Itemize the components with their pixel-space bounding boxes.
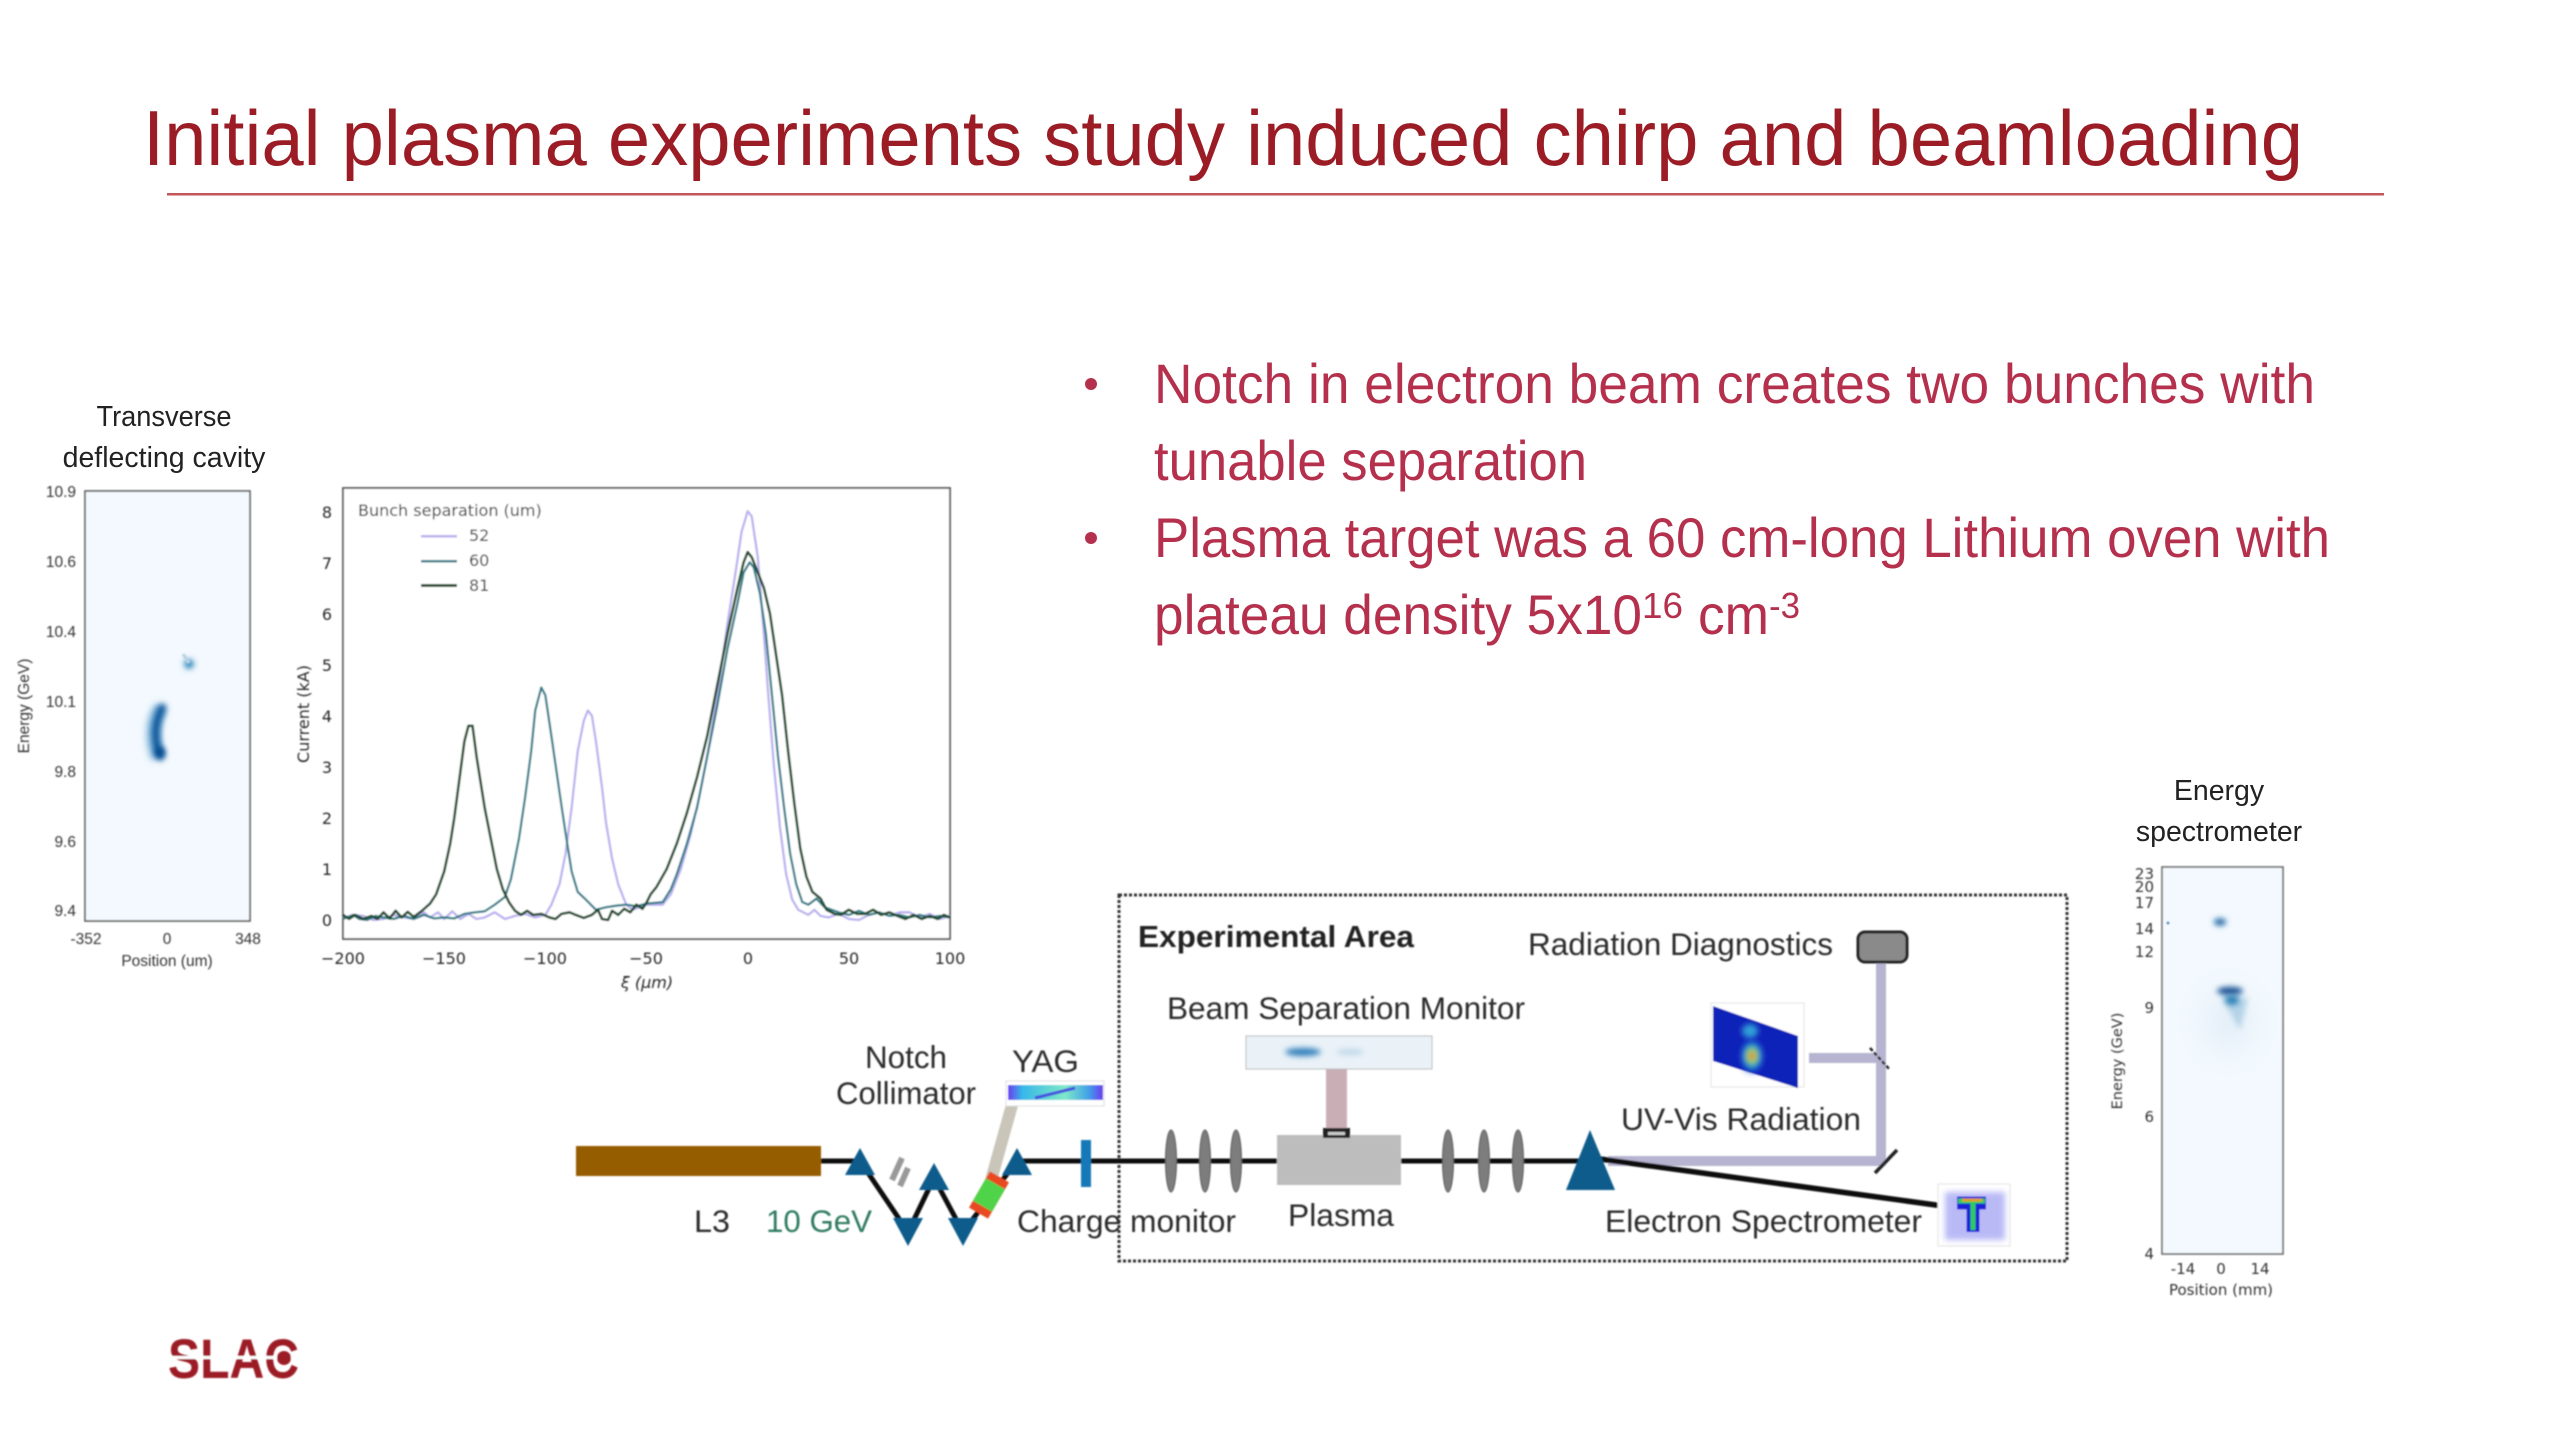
labels: Collimator [836,1075,976,1111]
caption: energy spectrometer: Energy [2174,775,2265,807]
YAG arm [990,1105,1012,1184]
bullet 2: 16 [1642,585,1683,626]
legend: 52 [469,526,489,545]
spectrometer image [1938,1184,2010,1246]
curves [343,511,950,920]
caption: transverse deflecting cavity: deflecting cavity [63,442,266,474]
x ticks and label: -14 [2171,1260,2195,1278]
UV-Vis image [1711,1003,1804,1088]
axis ticks: 9.4 [54,903,76,920]
labels: Electron Spectrometer [1605,1203,1922,1239]
YAG collimator block [969,1171,1009,1219]
y axis ticks: 7 [322,554,332,573]
heatmap: transverse deflecting cavity [16,484,261,970]
spots [153,654,194,758]
axis ticks: 9.8 [54,764,76,781]
x axis ticks [321,949,965,968]
L3 linac [576,1146,821,1176]
y axis ticks [322,503,332,930]
x axis ticks: −150 [422,949,466,968]
bullet 2: -3 [1769,585,1800,626]
y ticks: 9 [2144,999,2154,1017]
notch collimator icon [892,1158,908,1186]
curve 52 [343,511,950,920]
legend: 60 [469,551,489,570]
labels: YAG [1012,1043,1079,1079]
x ticks and label: 0 [2216,1260,2226,1278]
y axis label: Energy (GeV) [16,659,33,753]
bullet 2: Plasma target was a 60 cm-long Lithium oven with [1154,506,2330,569]
y axis ticks: 5 [322,656,332,675]
y ticks: 23 [2135,865,2154,883]
radiation diagnostics box [1858,932,1907,962]
label: experimental area: Experimental Area [1138,919,1415,954]
x ticks and label [2169,1260,2273,1299]
plot frame [343,488,950,939]
labels: Charge monitor [1017,1203,1236,1239]
labels: Radiation Diagnostics [1528,926,1833,962]
axis ticks: 10.6 [46,554,76,571]
y ticks: 12 [2135,943,2154,961]
experimental area box [1119,895,2067,1261]
bullet 2: plateau density 5x10 [1154,583,1642,646]
x labels: 348 [235,931,261,948]
line chart: current vs position [294,488,965,992]
legend: 81 [469,576,489,595]
beamline diagram [576,895,2067,1261]
mirrors [1870,1048,1897,1173]
caption: energy spectrometer [2136,775,2303,848]
YAG image [1006,1081,1104,1106]
axis titles: Current (kA) [294,665,313,763]
caption: transverse deflecting cavity [63,401,266,474]
labels: Plasma [1288,1197,1394,1233]
bullet 1: tunable separation [1154,429,1587,492]
y ticks [2135,865,2154,1263]
x axis ticks: −100 [523,949,567,968]
caption: transverse deflecting cavity: Transverse [96,401,232,433]
axis ticks: 10.9 [46,484,76,501]
y axis ticks: 4 [322,707,332,726]
beamline [821,1161,1592,1232]
y ticks: 6 [2144,1108,2154,1126]
axis ticks: 9.6 [54,834,76,851]
axis titles [294,665,673,992]
charge monitor bar [1081,1140,1091,1187]
x axis ticks: 50 [839,949,859,968]
labels: 10 GeV [766,1203,872,1239]
legend: Bunch separation (um) [358,501,542,520]
bullet 2: cm [1698,583,1769,646]
axis ticks: 10.1 [46,694,76,711]
labels: Beam Separation Monitor [1167,990,1525,1026]
heatmap: energy spectrometer [2110,865,2283,1299]
x axis ticks: 0 [743,949,753,968]
curve 60 [343,562,950,920]
y ticks: 14 [2135,920,2154,938]
labels: L3 [694,1203,730,1239]
x labels: Position (um) [121,953,213,970]
y ticks: 4 [2144,1245,2154,1263]
bullet list [1085,352,2330,646]
quadrupoles [1166,1130,1524,1192]
labels [694,926,1922,1239]
y axis ticks: 2 [322,809,332,828]
caption: energy spectrometer: spectrometer [2136,816,2303,848]
monitor port [1323,1128,1350,1138]
x labels: 0 [163,931,172,948]
title: Initial plasma experiments study induced chirp and beamloading [143,94,2303,182]
y axis ticks: 1 [322,860,332,879]
axis titles: ξ (μm) [620,973,673,992]
beam separation image [1246,1036,1432,1069]
radiation beam path [1608,962,1886,1166]
monitor stem [1326,1069,1347,1129]
y axis ticks: 6 [322,605,332,624]
legend [358,501,542,595]
y ticks: 20 [2135,878,2154,896]
curve 81 [343,552,950,920]
logo: SLAC: SLAC [168,1327,299,1390]
x axis ticks: −50 [629,949,663,968]
y axis ticks: 3 [322,758,332,777]
bullet 1 [1085,352,2315,492]
labels: Notch [865,1039,947,1075]
title underline [167,193,2384,196]
x axis ticks: 100 [935,949,965,968]
x labels: -352 [70,931,102,948]
y axis ticks: 8 [322,503,332,522]
bullet 2 [1085,506,2330,646]
y axis label: Energy (GeV) [2110,1013,2126,1109]
axis ticks: 10.4 [46,624,76,641]
dipole magnets [845,1130,1615,1246]
spots [2166,918,2252,1052]
y ticks: 17 [2135,894,2154,912]
x ticks and label: Position (mm) [2169,1281,2273,1299]
x axis ticks: −200 [321,949,365,968]
x ticks and label: 14 [2250,1260,2270,1278]
y axis ticks: 0 [322,911,332,930]
labels: UV-Vis Radiation [1621,1101,1861,1137]
plasma box [1277,1135,1401,1185]
x labels [70,931,261,970]
axis ticks [46,484,76,920]
bullet 1: Notch in electron beam creates two bunches with [1154,352,2315,415]
line to electron spectrometer [1600,1159,1943,1206]
